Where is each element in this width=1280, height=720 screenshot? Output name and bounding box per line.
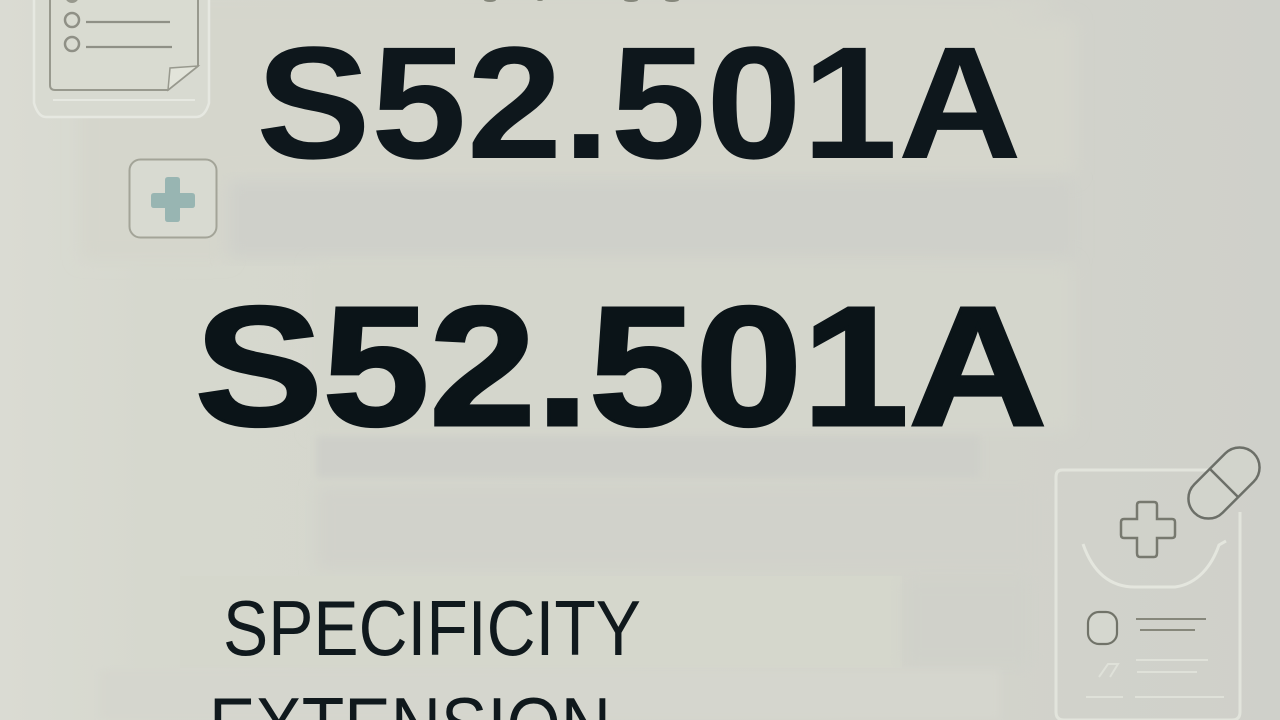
panel: shaded band under second code [316,436,980,478]
icon: capsule [1180,439,1268,527]
panel: right edge of label background [902,576,1032,668]
panel: shaded band under first code [228,180,1075,258]
icon: curved arrow [1083,541,1226,587]
icon: faded feather mark [1099,664,1118,677]
panel: top highlight [80,0,1075,260]
title: first code: S52.501A [256,13,1022,192]
title: second code: S52.501A [195,272,1047,462]
icon: outlined cross [1121,502,1175,557]
panel: lower shaded band [316,486,1036,570]
label: specificity: SPECIFICITY [223,584,641,672]
icon: medical cross badge [130,160,216,238]
cropped text remnants [484,0,679,2]
icon: medical record with capsule [1056,439,1268,720]
icon: avatar badge [1088,612,1117,644]
icon: faded lines [1086,660,1224,697]
panel: band behind second code [312,264,1072,432]
icon: checklist document [34,0,209,117]
panel: specificity label background [180,576,902,668]
icon: text lines [1136,619,1206,630]
panel: extension label background [100,670,1000,720]
